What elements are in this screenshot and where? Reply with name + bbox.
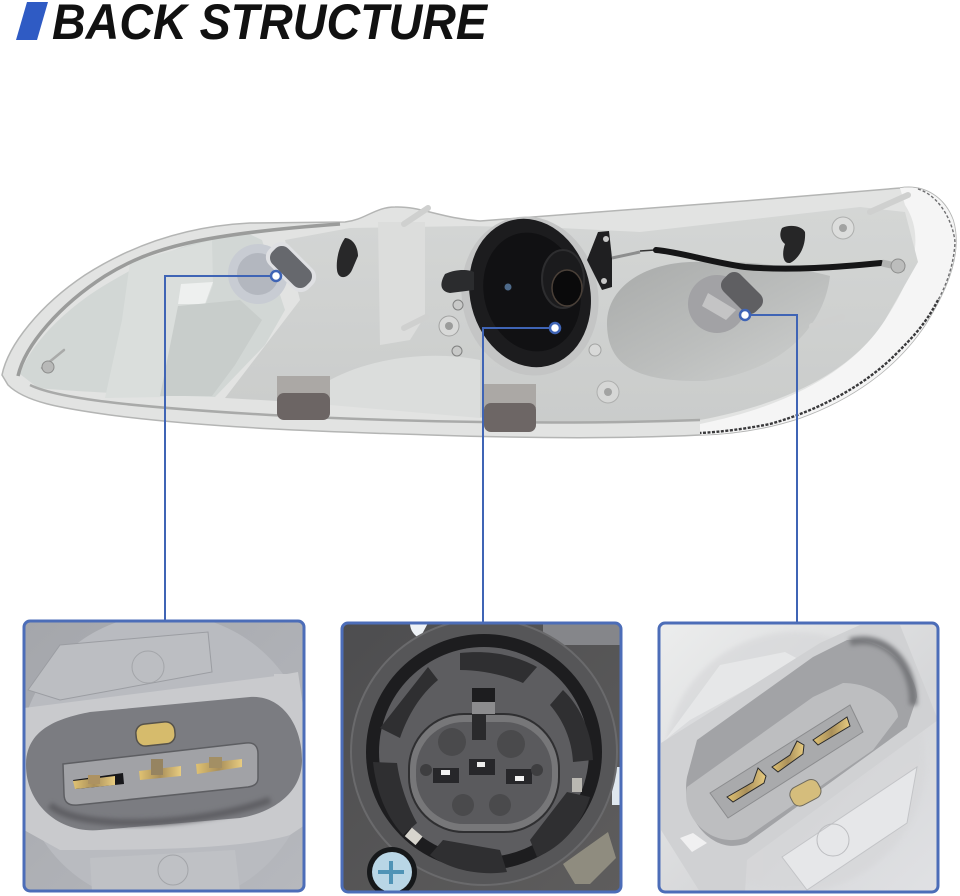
dark lens edge upper (918, 189, 955, 300)
center contact (135, 721, 176, 747)
right bulb socket (688, 268, 767, 333)
cavity shade (850, 640, 913, 705)
bottom-right tan patch (563, 832, 616, 884)
plug tab (274, 674, 286, 676)
cavity floor (686, 683, 898, 840)
black bulb socket (454, 206, 606, 380)
keyway (472, 688, 495, 740)
lower raised label (92, 886, 240, 890)
black wire (612, 250, 905, 269)
lamp assembly rear view (2, 187, 956, 438)
socket disc (29, 622, 282, 886)
dark lens edge lower (700, 300, 938, 433)
lamp outer housing (2, 187, 956, 438)
reflector facets (105, 240, 213, 398)
center lower shelf (330, 356, 480, 418)
left reflector recess (20, 232, 285, 397)
connector oval inner (416, 722, 552, 824)
plug outer band (24, 672, 305, 850)
right reflector bowl (607, 262, 830, 381)
dark channel ring (366, 634, 602, 870)
clear lens right edge (700, 187, 956, 435)
inner grey ring (379, 647, 589, 857)
white gap top (410, 624, 428, 636)
plug outer band (661, 625, 938, 892)
white gap right (612, 767, 620, 805)
black tab right (780, 226, 805, 263)
wire connector bracket (587, 231, 612, 290)
panel: center connector close-up (342, 619, 621, 896)
icon: blue slanted marker (16, 2, 48, 40)
pin platform (63, 743, 258, 805)
highlight tabs (405, 828, 423, 845)
callout: right connector (740, 310, 797, 622)
plug cavity (26, 697, 302, 830)
black tab left (337, 238, 358, 277)
cavity highlight (50, 800, 270, 823)
pins (727, 717, 850, 809)
pins (73, 757, 242, 789)
foam pad right (484, 384, 536, 432)
locking segments (373, 652, 593, 873)
mounting tab (441, 270, 474, 293)
pins (420, 728, 543, 816)
callout: center connector (483, 323, 560, 622)
pin platform (710, 705, 863, 818)
plug foot tab (680, 833, 707, 852)
lower raised label (782, 767, 917, 890)
panel: left connector close-up (19, 614, 311, 896)
vertical bracket (378, 222, 425, 345)
panel: right connector close-up (659, 623, 938, 892)
outer ring (351, 619, 617, 885)
plug cavity (686, 640, 917, 846)
black socket collar (447, 204, 613, 388)
screws and nuts (42, 217, 905, 403)
top-right lighter backing (543, 623, 621, 645)
connector oval collar (409, 714, 559, 832)
callout: left connector (165, 271, 281, 620)
center housing (225, 207, 918, 423)
studs (42, 195, 908, 368)
bottom rim groove (30, 385, 700, 422)
upper raised label (28, 632, 212, 700)
left top dark rim (18, 224, 340, 376)
foam pad left (277, 376, 330, 420)
left bulb socket (228, 237, 321, 304)
blue screw (367, 847, 417, 890)
socket disc (671, 635, 797, 736)
upper raised label (665, 652, 800, 740)
